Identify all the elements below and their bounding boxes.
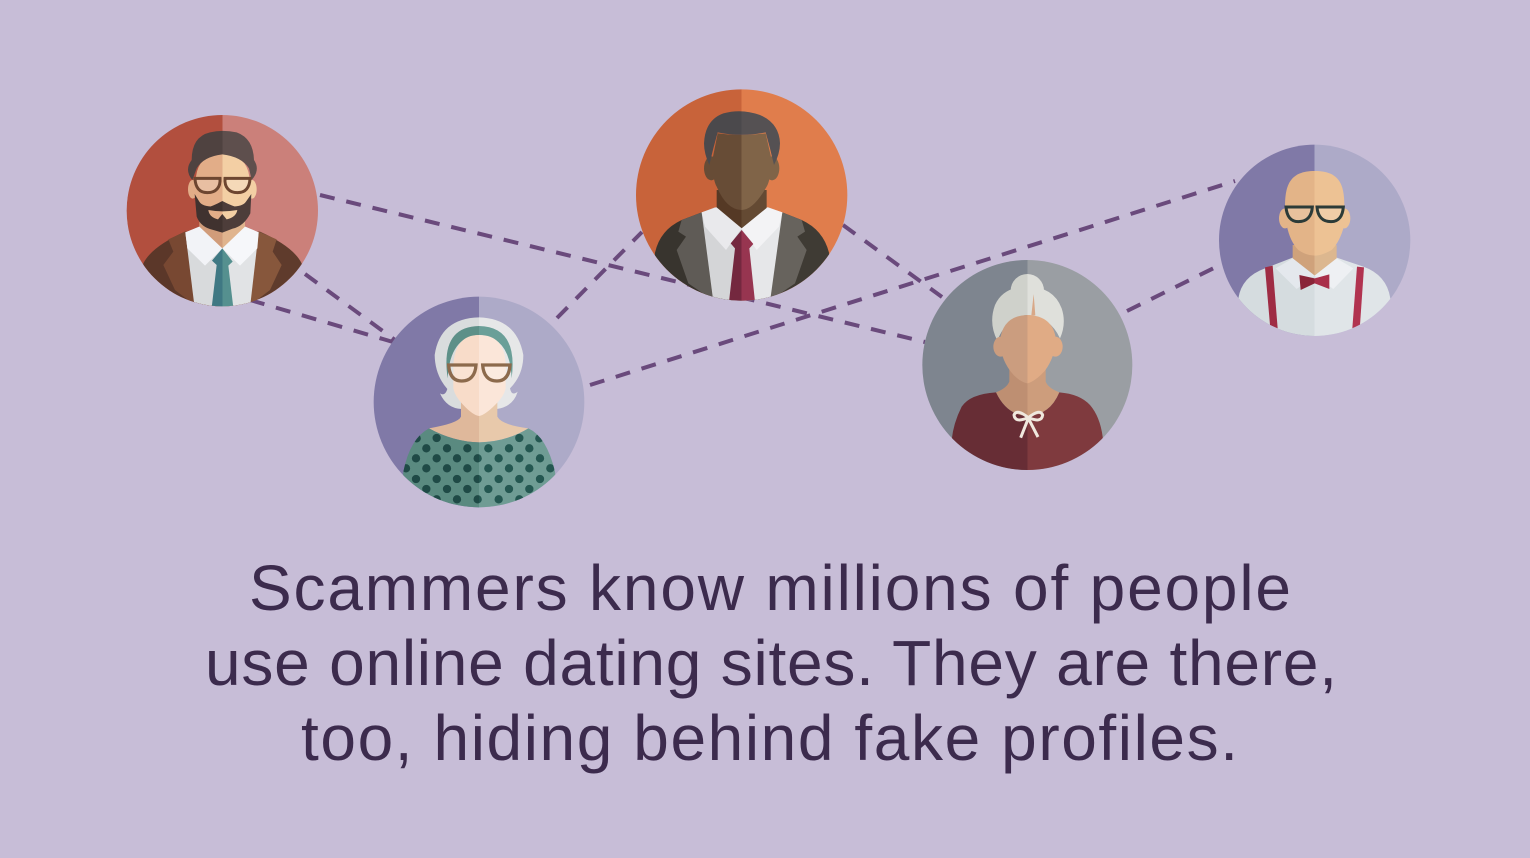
dashed network connections — [250, 181, 1235, 385]
caption text: too, hiding behind fake profiles. — [301, 702, 1238, 774]
caption text: use online dating sites. They are there, — [205, 627, 1337, 699]
avatar: man in dark suit with red tie — [636, 89, 847, 313]
avatar: bald man with bow tie and suspenders — [1219, 145, 1410, 352]
avatar: older woman with grey bun and ribbon — [922, 260, 1132, 483]
avatar: older woman with polka dot blouse — [374, 297, 584, 518]
caption text — [205, 552, 1337, 774]
caption text: Scammers know millions of people — [249, 552, 1291, 624]
avatar: bearded man with teal tie — [127, 115, 318, 313]
